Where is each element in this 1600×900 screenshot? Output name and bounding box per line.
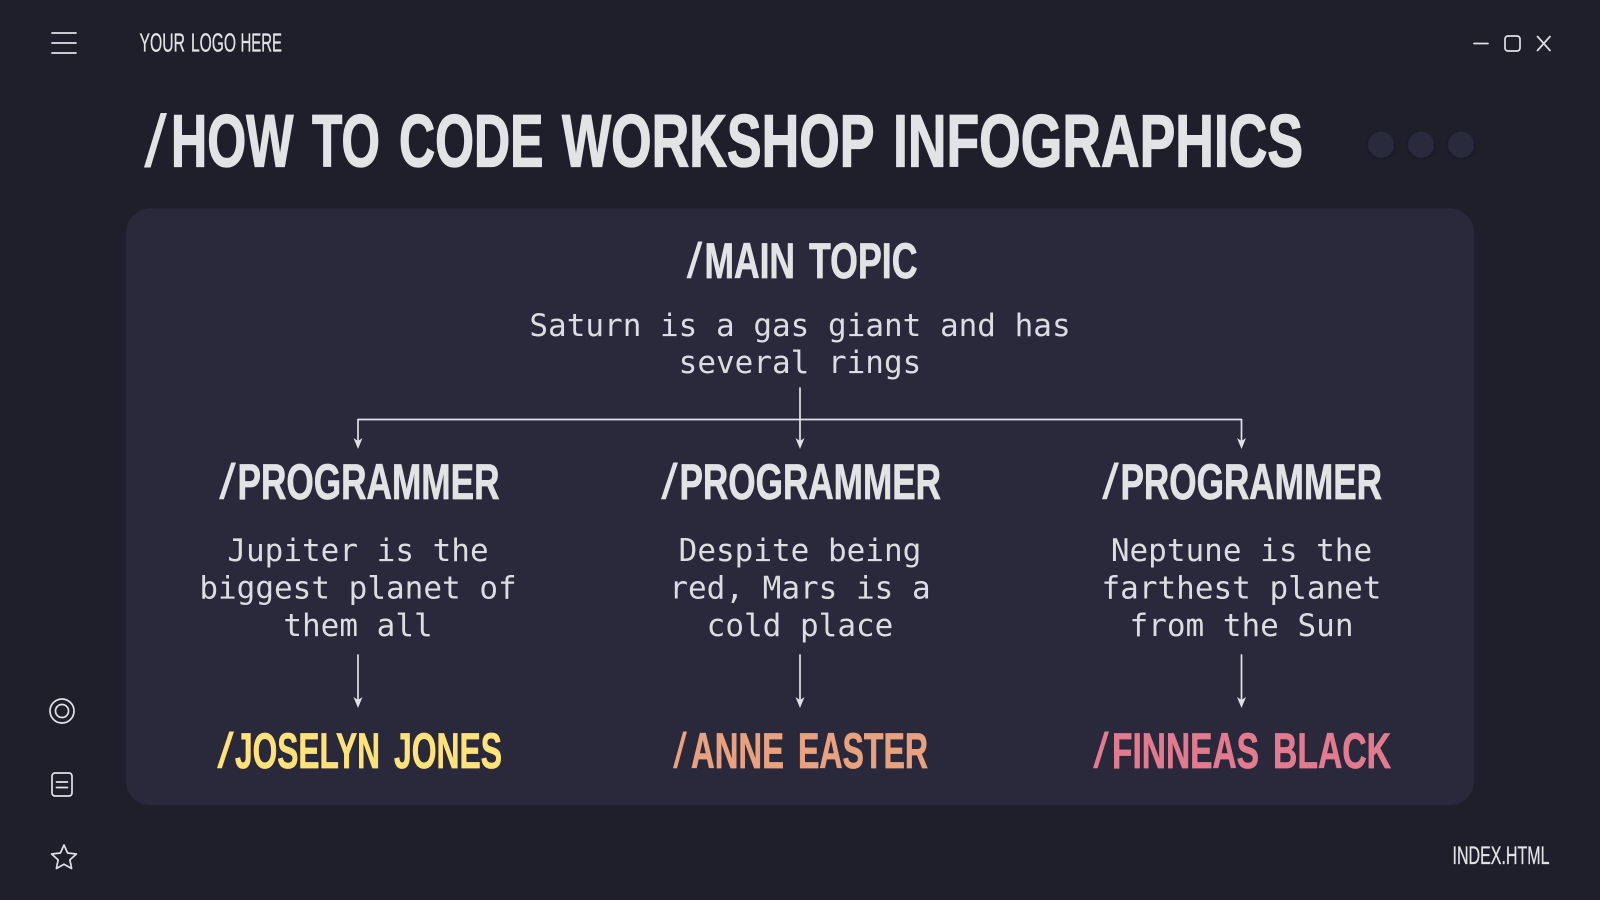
- name: Anne Easter: /: [673, 723, 687, 779]
- logo text: HERE: [240, 28, 282, 58]
- window controls: [1474, 36, 1550, 51]
- column: programmer 3: [1093, 454, 1391, 779]
- heading: programmer 2: PROGRAMMER: [680, 454, 941, 510]
- name: Finneas Black: BLACK: [1273, 723, 1391, 779]
- heading: programmer 2: [661, 454, 941, 510]
- name: Anne Easter: [673, 723, 928, 779]
- name: Joselyn Jones: JOSELYN: [235, 723, 380, 779]
- heading: main topic: [686, 233, 918, 289]
- branching arrows: [354, 388, 1246, 449]
- main topic description: several rings: [679, 345, 921, 381]
- heading: main topic: MAIN: [704, 233, 795, 289]
- icon: minimize: [1474, 42, 1488, 44]
- name: Joselyn Jones: /: [217, 723, 234, 779]
- icon: maximize: [1505, 36, 1520, 51]
- title: INFOGRAPHICS: [893, 100, 1303, 182]
- description: programmer 3: from the Sun: [1130, 608, 1353, 644]
- description: programmer 1: Jupiter is the: [227, 533, 489, 569]
- column: programmer 1: [199, 454, 517, 779]
- icon: star: [52, 845, 76, 868]
- name: Anne Easter: ANNE: [691, 723, 784, 779]
- logo text: YOUR: [140, 28, 185, 58]
- heading: programmer 2: /: [661, 454, 678, 510]
- logo text: [140, 28, 282, 58]
- heading: main topic: TOPIC: [809, 233, 918, 289]
- panel: org chart: [126, 208, 1474, 805]
- heading: programmer 1: /: [219, 454, 236, 510]
- heading: programmer 3: /: [1102, 454, 1119, 510]
- name: Finneas Black: /: [1093, 723, 1109, 779]
- heading: programmer 1: [219, 454, 500, 510]
- heading: programmer 3: PROGRAMMER: [1120, 454, 1382, 510]
- icon: hamburger menu: [52, 33, 76, 53]
- description: programmer 2: Despite being: [679, 533, 921, 569]
- name: Joselyn Jones: JONES: [394, 723, 502, 779]
- panel background: [126, 208, 1474, 805]
- footer file name: INDEX.HTML: [1452, 842, 1550, 870]
- main topic description: Saturn is a gas giant and has: [529, 308, 1071, 344]
- logo text: LOGO: [191, 28, 236, 58]
- title: /: [144, 100, 167, 183]
- arrow: programmer 1: [354, 655, 362, 708]
- heading: programmer 3: [1102, 454, 1382, 510]
- title: HOW: [171, 100, 294, 182]
- arrow: programmer 3: [1237, 655, 1246, 708]
- icon: target circle: [50, 699, 74, 723]
- description: programmer 1: them all: [283, 608, 433, 644]
- column: programmer 2: [661, 454, 941, 779]
- description: programmer 3: farthest planet: [1102, 570, 1381, 606]
- icon: document: [52, 773, 72, 796]
- heading: main topic: /: [686, 233, 703, 289]
- name: Anne Easter: EASTER: [798, 723, 928, 779]
- description: programmer 2: cold place: [707, 608, 893, 644]
- title: [144, 100, 1303, 183]
- heading: programmer 1: PROGRAMMER: [238, 454, 500, 510]
- description: programmer 2: red, Mars is a: [669, 570, 931, 606]
- description: programmer 1: biggest planet of: [199, 570, 517, 606]
- arrow: programmer 2: [796, 655, 804, 708]
- title: TO: [312, 100, 380, 182]
- icon: close: [1538, 36, 1550, 50]
- title: CODE: [399, 100, 544, 182]
- name: Finneas Black: FINNEAS: [1112, 723, 1259, 779]
- description: programmer 3: Neptune is the: [1111, 533, 1372, 569]
- decorative window dots: [1368, 132, 1474, 158]
- title: WORKSHOP: [562, 100, 874, 182]
